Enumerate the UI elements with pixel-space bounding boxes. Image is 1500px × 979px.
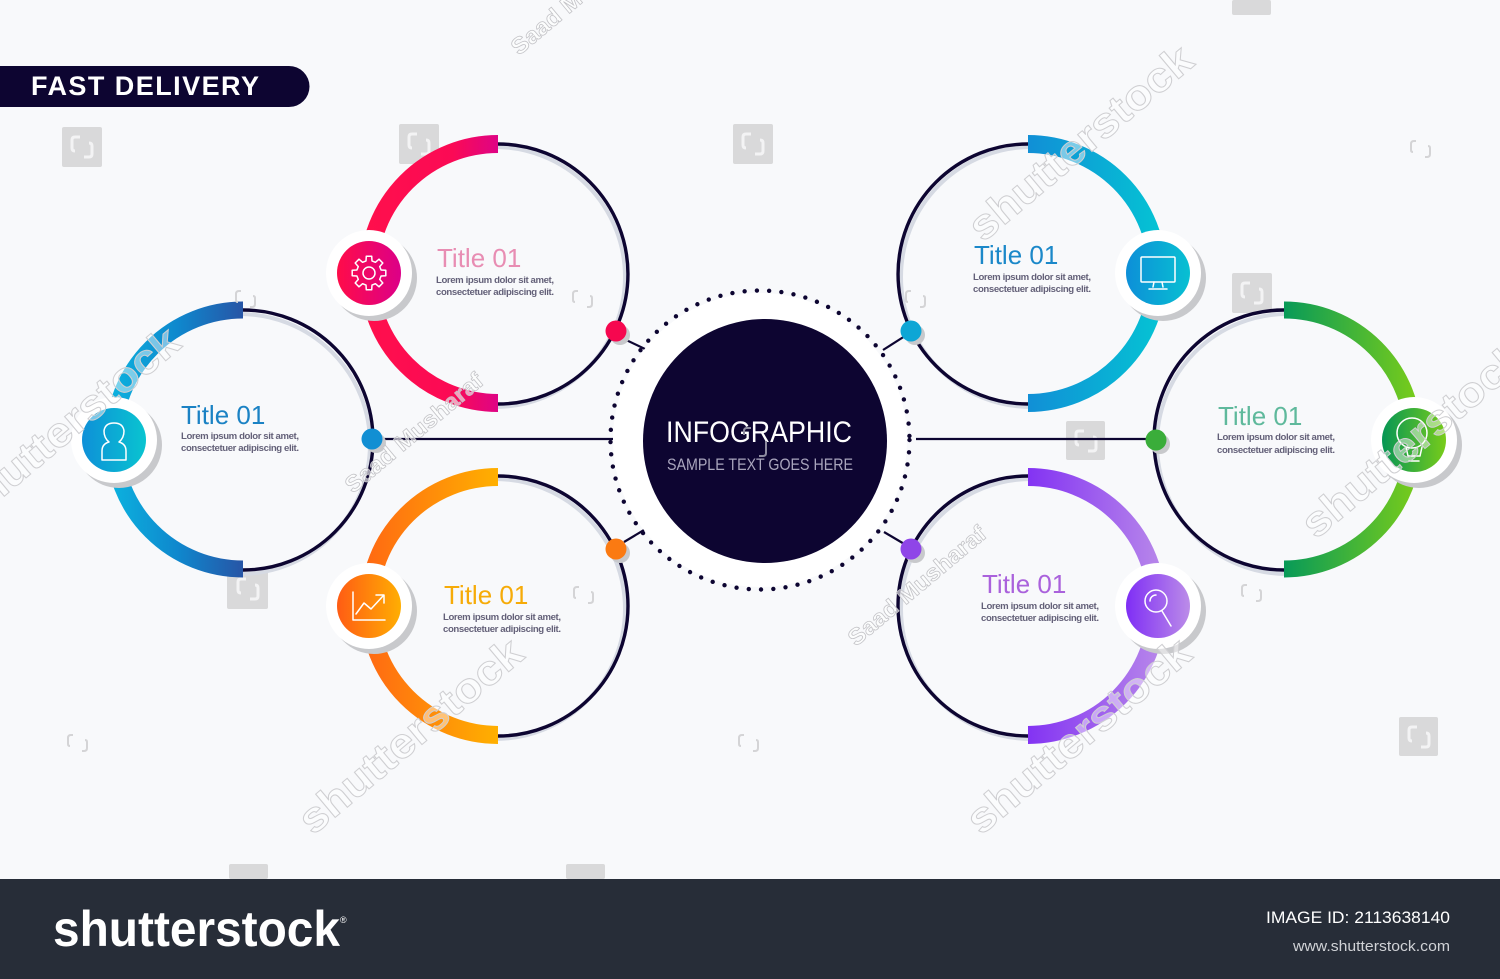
node dot: settings step [606,320,630,345]
body text: growth chart step [443,612,561,635]
panel: monitor step (top right) [898,144,1206,407]
connector lines [381,336,1148,545]
body text: person step [181,431,299,454]
node dot: search step [900,538,925,563]
body text: idea step: consectetuer adipiscing elit. [1217,445,1335,456]
watermark text: Saad Musharaf [843,520,991,651]
body text: person step: consectetuer adipiscing elit. [181,443,299,454]
icon: monitor [1115,230,1206,321]
header banner: fast delivery: FAST DELIVERY [31,71,259,101]
footer image id: IMAGE ID: 2113638140 [1266,909,1450,927]
body text: person step: Lorem ipsum dolor sit amet, [181,431,299,442]
node dot: growth chart step [606,538,630,563]
hub subheading: SAMPLE TEXT GOES HERE [667,456,853,474]
central hub [610,290,910,590]
node dot: monitor step [900,320,925,345]
hub heading: INFOGRAPHIC [666,416,852,449]
icon: magnifier [1115,563,1206,654]
body text: search step: consectetuer adipiscing elit. [981,613,1099,624]
title: monitor step: Title 01 [974,240,1058,270]
node dot: idea step [1146,430,1170,454]
body text: monitor step: Lorem ipsum dolor sit amet, [973,272,1091,283]
panel: settings step (top left) [326,144,630,407]
footer url: www.shutterstock.com [1292,938,1450,955]
body text: idea step [1217,432,1335,456]
watermark text: shutterstock [289,628,532,843]
body text: settings step: Lorem ipsum dolor sit amet, [436,275,554,286]
footer logo: shutterstock [53,901,340,957]
footer registered mark: ® [340,915,347,925]
footer bar [0,879,1500,979]
watermark square marks [72,134,1429,747]
watermark text: shutterstock [957,628,1200,843]
body text: search step: Lorem ipsum dolor sit amet, [981,601,1099,612]
header banner: fast delivery [0,66,310,107]
icon: light bulb [1371,397,1462,488]
title: growth chart step: Title 01 [444,580,528,610]
body text: monitor step [973,272,1091,295]
title: settings step: Title 01 [437,243,521,273]
panel: idea step (right) [1146,310,1462,574]
body text: search step [981,601,1099,624]
panel: growth chart step (bottom left) [326,476,630,739]
watermark text: shutterstock [959,35,1202,250]
body text: settings step [436,275,554,298]
title: person step: Title 01 [181,400,265,430]
body text: growth chart step: consectetuer adipiscing elit. [443,624,561,635]
icon: person [71,397,162,488]
icon: gear [326,230,417,321]
title: idea step: Title 01 [1218,401,1302,431]
watermark small marks [68,141,1430,751]
body text: idea step: Lorem ipsum dolor sit amet, [1217,432,1335,443]
panel: search step (bottom right) [898,476,1206,739]
watermark text: Saad Musharaf [340,367,488,498]
node dot: person step [362,428,386,453]
body text: growth chart step: Lorem ipsum dolor sit amet, [443,612,561,623]
icon: line chart [326,563,417,654]
body text: monitor step: consectetuer adipiscing elit. [973,284,1091,295]
panel: person step (left) [71,310,386,574]
body text: settings step: consectetuer adipiscing elit. [436,287,554,298]
title: search step: Title 01 [982,569,1066,599]
